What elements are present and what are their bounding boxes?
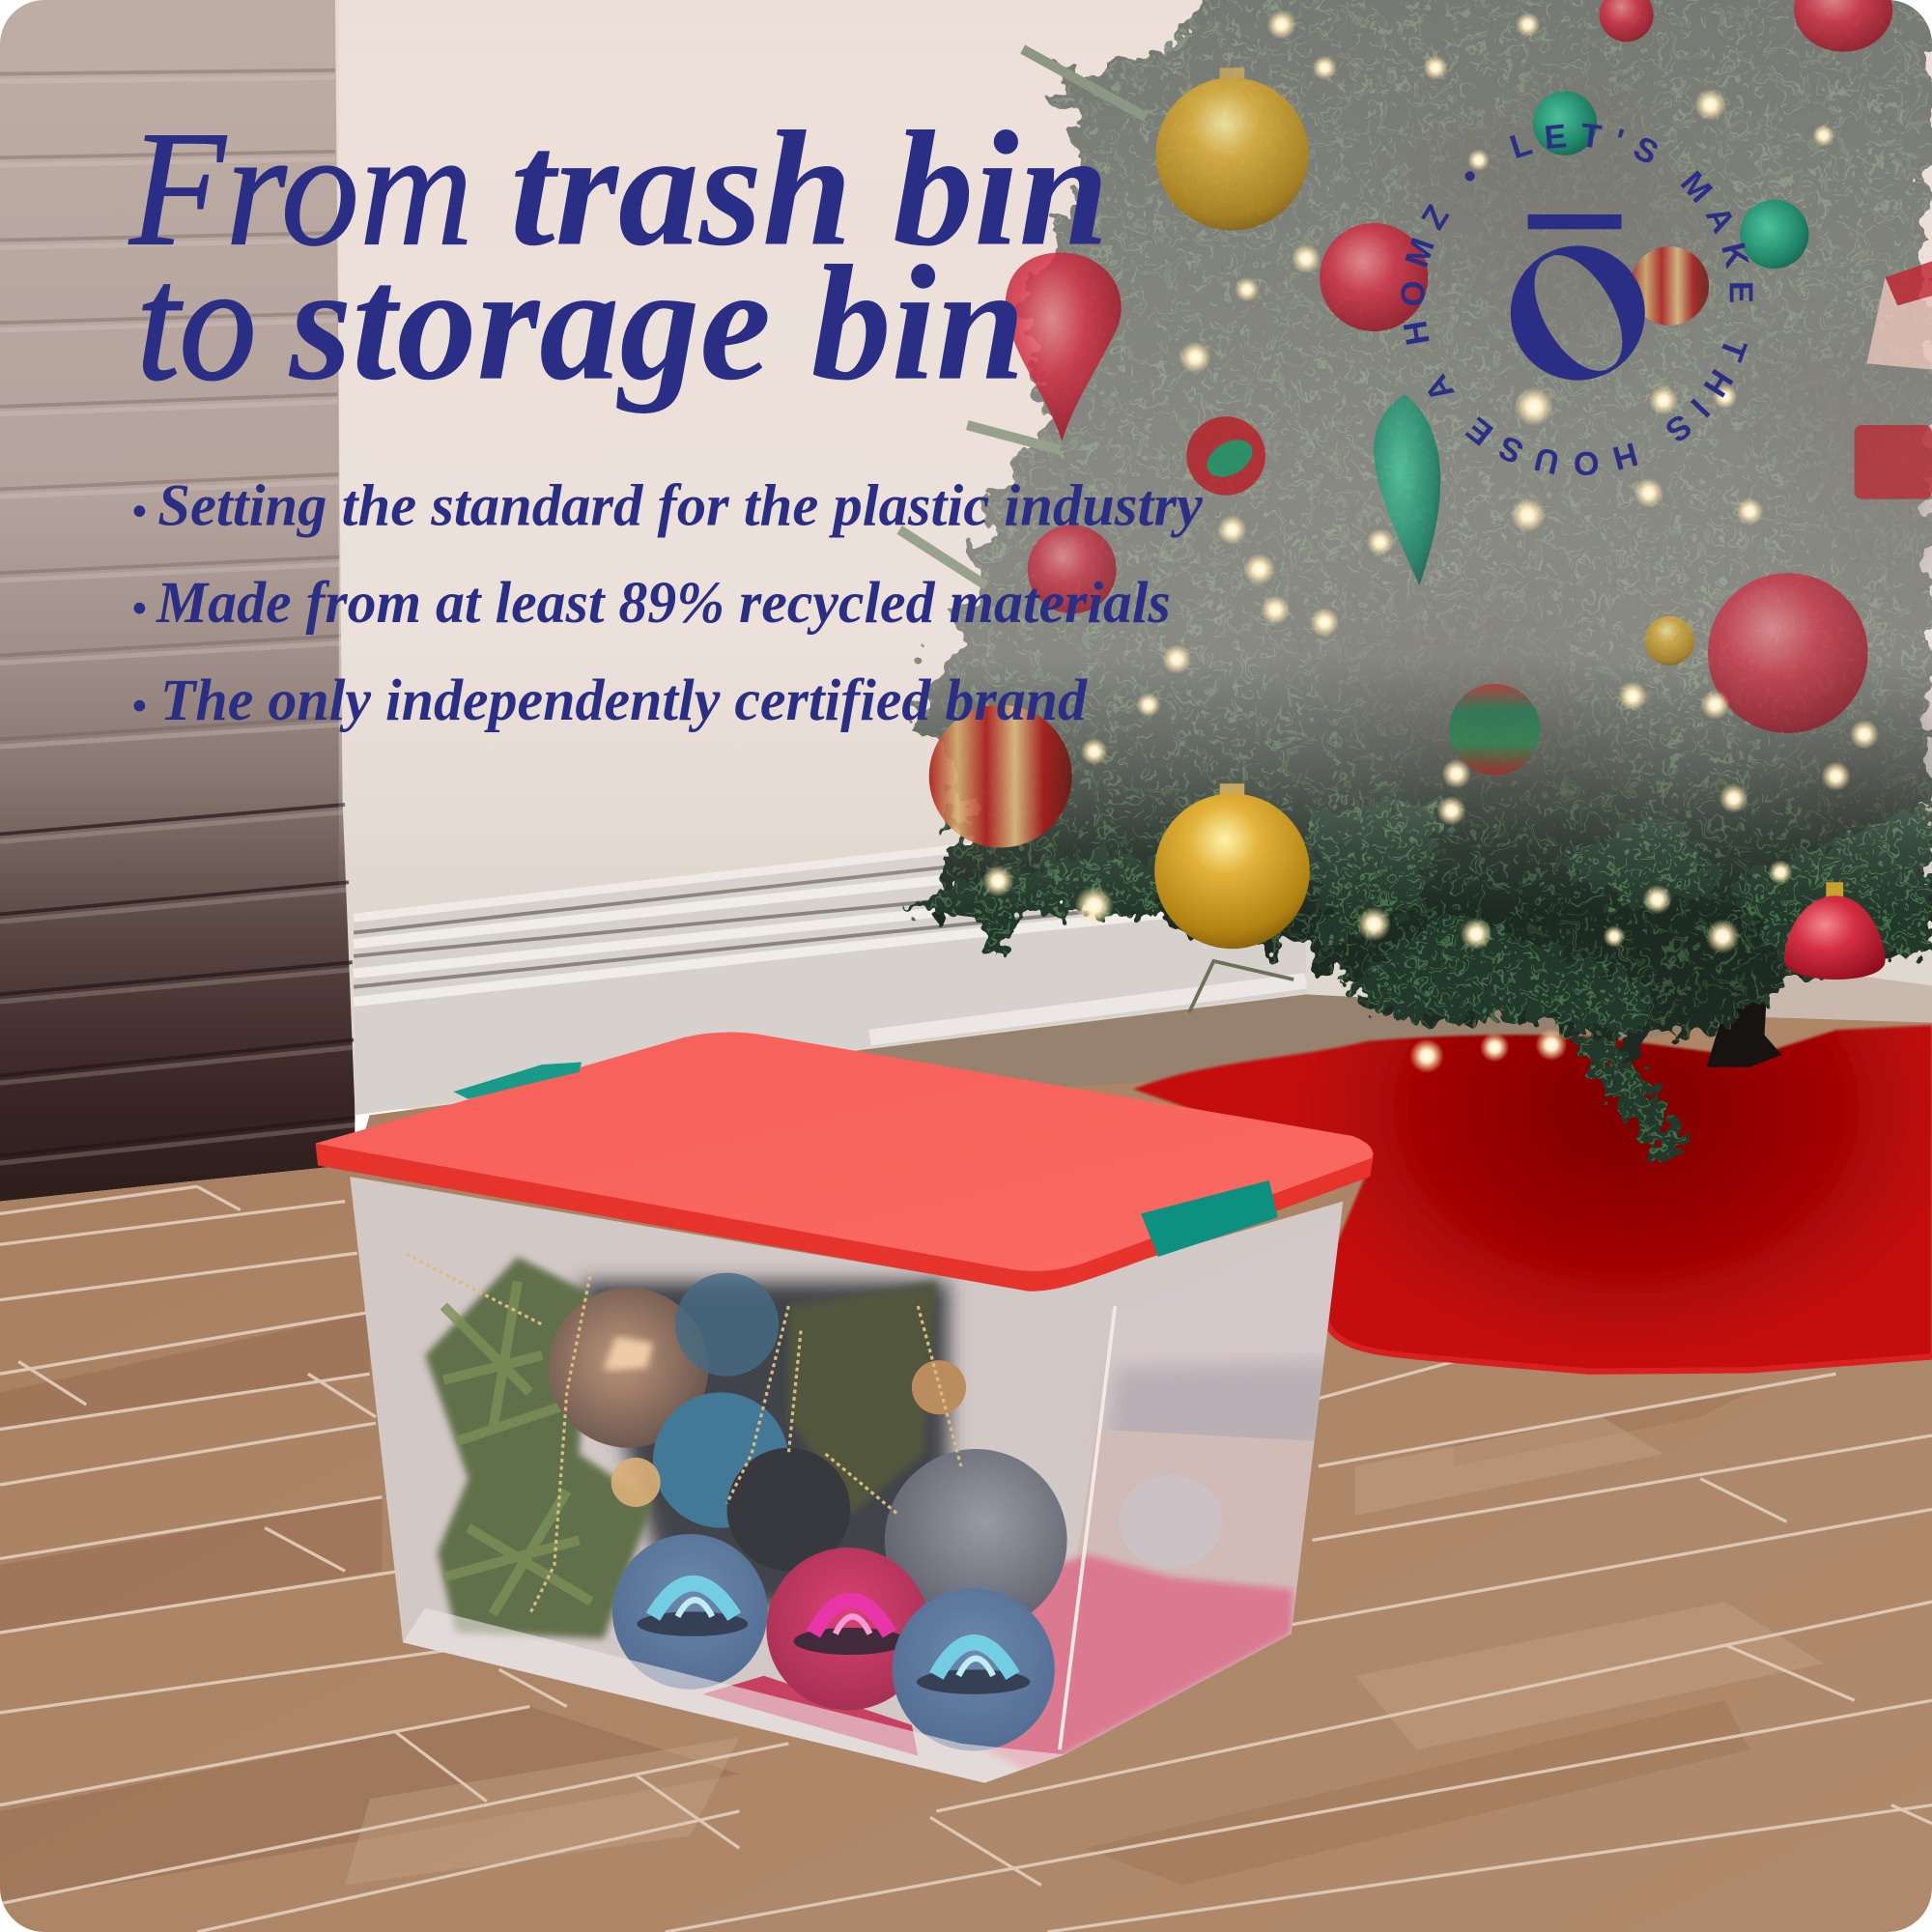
blue bauble right [892, 1588, 1055, 1750]
blue bauble left [612, 1534, 768, 1690]
bullet list: • [131, 488, 147, 534]
christmas tree [899, 0, 1932, 1161]
bullet list: Setting the standard for the plastic industry [157, 472, 1204, 538]
title [128, 98, 1109, 414]
circular slogan: LET'S MAKE THIS HOUSE A HOMZ [1401, 124, 1752, 475]
bin contents [407, 1220, 1343, 1775]
bullet list [131, 472, 1204, 733]
title: to [137, 232, 256, 414]
ornaments on tree [929, 0, 1932, 980]
slogan dot [1465, 171, 1475, 182]
white fade overlay [339, 0, 1932, 985]
front teal latch [1141, 1180, 1278, 1257]
circular logo badge [1401, 124, 1752, 475]
logo letter o [1511, 245, 1645, 381]
dark siding panel [0, 0, 355, 1202]
back teal latch [453, 1062, 582, 1099]
bin corner edge [1060, 1306, 1115, 1749]
baseboard [354, 842, 1932, 1115]
bullet list: Made from at least 89% recycled materials [156, 570, 1171, 636]
bullet list: • [131, 683, 147, 729]
bullet list: • [131, 585, 147, 632]
translucent plastic sheen [406, 1253, 1294, 1755]
storage bin [316, 1033, 1374, 1783]
title: storage bin [289, 232, 1025, 414]
lid top [316, 1033, 1373, 1271]
logo macron bar [1528, 214, 1622, 229]
tree trunk [1706, 1003, 1781, 1067]
red tree skirt [1133, 1025, 1932, 1373]
fairy lights [982, 10, 1879, 1073]
lid rim [316, 1144, 1374, 1292]
wall [332, 0, 1932, 1109]
pink bauble [766, 1548, 929, 1710]
bullet list: The only independently certified brand [160, 668, 1088, 733]
bin body [350, 1177, 1343, 1783]
title: From [128, 98, 473, 280]
title: trash bin [510, 98, 1109, 280]
floor [0, 994, 1932, 1932]
